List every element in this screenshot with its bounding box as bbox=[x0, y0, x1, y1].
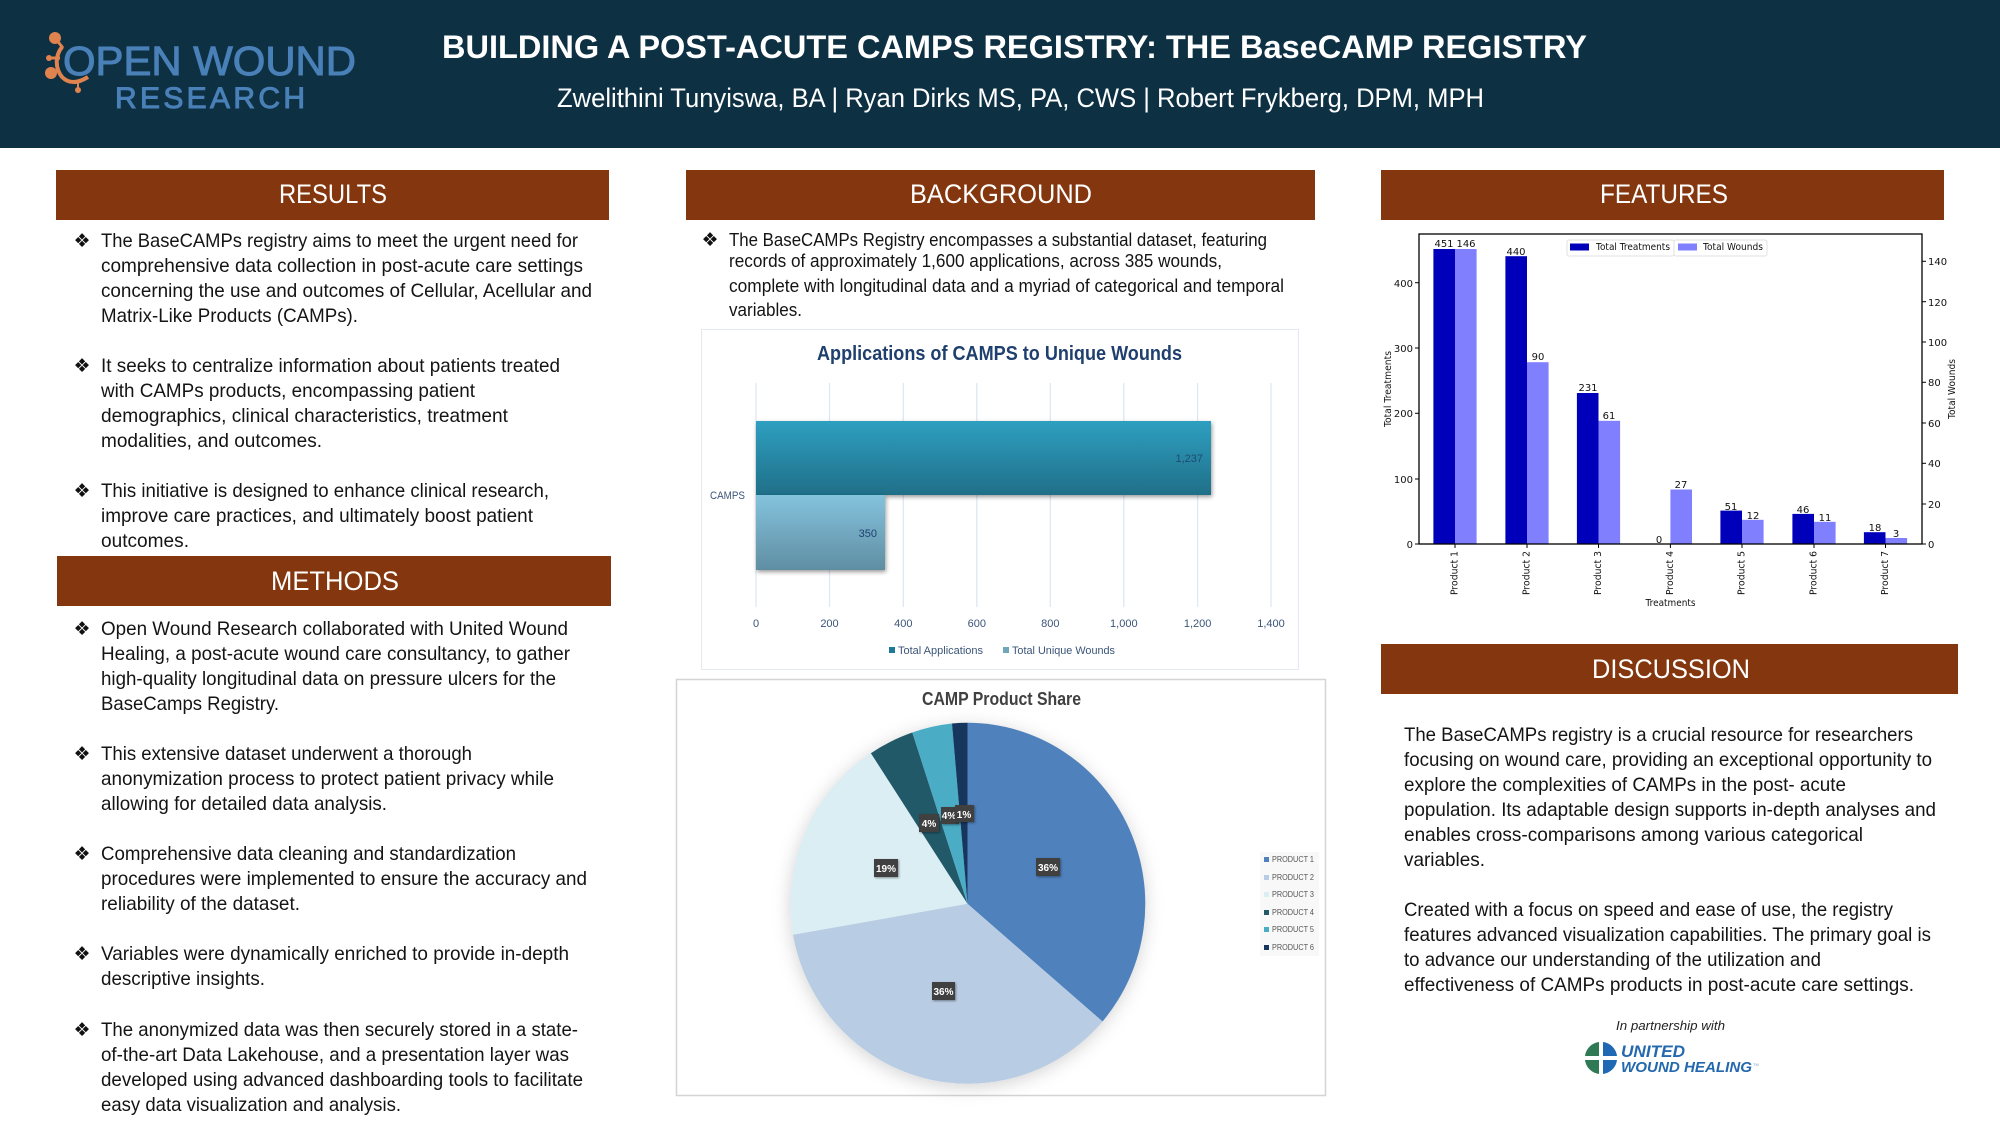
value labels: 27 bbox=[1675, 480, 1687, 491]
right axis labels: 80 bbox=[1928, 378, 1941, 389]
results bullet 1: concerning the use and outcomes of Cellular, Acellular and bbox=[101, 280, 592, 302]
background bullet: complete with longitudinal data and a myriad of categorical and temporal bbox=[729, 275, 1284, 296]
results bullet 1: comprehensive data collection in post-acute care settings bbox=[101, 255, 583, 277]
panel: methods bbox=[57, 556, 611, 1116]
value labels: 12 bbox=[1747, 511, 1759, 522]
pie chart title: CAMP Product Share bbox=[922, 689, 1081, 709]
value labels: 0 bbox=[1656, 535, 1662, 546]
value axis: 0 bbox=[753, 618, 759, 630]
data labels: 4% bbox=[942, 811, 956, 822]
logo: United Wound Healing bbox=[1585, 1042, 1759, 1076]
value labels: 451 bbox=[1434, 239, 1454, 250]
bar: total unique wounds: 350 bbox=[859, 528, 877, 540]
results bullet 2: demographics, clinical characteristics, treatment bbox=[101, 405, 509, 427]
discussion paragraph 2: features advanced visualization capabilities. The primary goal is bbox=[1404, 924, 1931, 946]
data labels: 1% bbox=[957, 810, 971, 821]
axes frame bbox=[1419, 234, 1922, 544]
data labels: 19% bbox=[876, 864, 896, 875]
right axis labels: 20 bbox=[1928, 500, 1941, 511]
left axis labels: 0 bbox=[1407, 540, 1413, 551]
discussion paragraph 2 bbox=[1404, 899, 1931, 996]
pie slices bbox=[790, 723, 1145, 1084]
value axis: 1,200 bbox=[1184, 618, 1211, 630]
background bullet bbox=[701, 229, 1284, 320]
axis titles bbox=[1383, 351, 1958, 609]
pie legend bbox=[1260, 852, 1319, 956]
results bullet 3 bbox=[73, 480, 549, 552]
value labels: 3 bbox=[1893, 529, 1899, 540]
product labels: Product 2 bbox=[1522, 551, 1532, 595]
value labels: 61 bbox=[1603, 411, 1615, 422]
chart legend: Total Applications bbox=[898, 645, 983, 657]
value axis: 600 bbox=[968, 618, 986, 630]
left axis labels: 300 bbox=[1394, 344, 1413, 355]
methods bullet 5 bbox=[73, 1019, 583, 1116]
product labels bbox=[1450, 551, 1891, 595]
bar chart: applications of CAMPS to unique wounds bbox=[702, 330, 1298, 670]
methods bullet 2: anonymization process to protect patient privacy while bbox=[101, 768, 554, 790]
background bullet: records of approximately 1,600 applications, across 385 wounds, bbox=[729, 250, 1222, 271]
data labels bbox=[874, 805, 1060, 1000]
pie legend: PRODUCT 5 bbox=[1272, 925, 1314, 934]
value labels: 46 bbox=[1797, 505, 1809, 516]
data labels: 36% bbox=[1038, 863, 1058, 874]
heading: background: BACKGROUND bbox=[910, 179, 1092, 209]
heading: methods bbox=[57, 556, 611, 606]
results bullet 1: ❖ bbox=[73, 230, 91, 252]
background bullet: ❖ bbox=[701, 229, 719, 251]
heading: results bbox=[56, 170, 609, 220]
product labels: Product 6 bbox=[1808, 551, 1820, 595]
logo: Open Wound Research bbox=[45, 32, 356, 115]
pie legend: PRODUCT 1 bbox=[1272, 855, 1314, 864]
panel: results bbox=[56, 170, 609, 552]
right axis labels: 0 bbox=[1928, 540, 1934, 551]
methods bullet 2: ❖ bbox=[73, 743, 91, 765]
methods bullet 5: The anonymized data was then securely stored in a state- bbox=[101, 1019, 578, 1041]
right axis labels: 120 bbox=[1928, 298, 1947, 309]
methods bullet 3: procedures were implemented to ensure the accuracy and bbox=[101, 868, 587, 890]
pie legend: PRODUCT 6 bbox=[1272, 943, 1314, 952]
bar: total unique wounds bbox=[756, 495, 885, 570]
left axis labels bbox=[1394, 279, 1413, 551]
value labels: 90 bbox=[1532, 352, 1544, 363]
methods bullet 3: reliability of the dataset. bbox=[101, 893, 300, 915]
chart legend bbox=[1567, 240, 1767, 256]
value axis: 1,400 bbox=[1257, 618, 1285, 630]
category label: CAMPS bbox=[710, 490, 745, 502]
background bullet: The BaseCAMPs Registry encompasses a substantial dataset, featuring bbox=[729, 229, 1267, 250]
discussion paragraph 1: explore the complexities of CAMPs in the post- acute bbox=[1404, 774, 1846, 796]
discussion paragraph 2: to advance our understanding of the utilization and bbox=[1404, 949, 1821, 971]
data labels: 36% bbox=[933, 987, 954, 998]
treatment bars bbox=[1433, 249, 1886, 544]
methods bullet 1: BaseCamps Registry. bbox=[101, 693, 279, 715]
background bullet: variables. bbox=[729, 299, 802, 320]
heading: discussion: DISCUSSION bbox=[1592, 654, 1750, 684]
axis titles: Treatments bbox=[1645, 598, 1696, 609]
left axis labels: 100 bbox=[1394, 475, 1413, 486]
wound bars bbox=[1455, 249, 1907, 544]
value labels: 146 bbox=[1456, 239, 1476, 250]
results bullet 2: ❖ bbox=[73, 355, 91, 377]
pie chart: CAMP product share bbox=[676, 680, 1326, 1096]
value labels: 440 bbox=[1506, 247, 1526, 258]
chart legend: Total Wounds bbox=[1702, 242, 1763, 253]
discussion paragraph 2: effectiveness of CAMPs products in post-acute care settings. bbox=[1404, 974, 1914, 996]
value labels: 51 bbox=[1725, 502, 1737, 513]
methods bullet 4 bbox=[73, 943, 569, 990]
results bullet 1: Matrix-Like Products (CAMPs). bbox=[101, 305, 358, 327]
results bullet 2 bbox=[73, 355, 560, 452]
panel: features bbox=[1381, 170, 1958, 609]
pie legend: PRODUCT 2 bbox=[1272, 873, 1314, 882]
results bullet 2: modalities, and outcomes. bbox=[101, 430, 322, 452]
results bullet 3: This initiative is designed to enhance clinical research, bbox=[101, 480, 549, 502]
value labels: 18 bbox=[1869, 523, 1881, 534]
methods bullet 3 bbox=[73, 843, 587, 915]
value labels: 11 bbox=[1819, 513, 1831, 524]
title: BUILDING A POST-ACUTE CAMPS REGISTRY: THE BaseCAMP REGISTRY bbox=[442, 29, 1587, 65]
value axis: 1,000 bbox=[1110, 618, 1138, 630]
discussion paragraph 2: Created with a focus on speed and ease of use, the registry bbox=[1404, 899, 1893, 921]
results bullet 1 bbox=[73, 230, 592, 327]
heading: results: RESULTS bbox=[279, 179, 387, 209]
methods bullet 5: developed using advanced dashboarding tools to facilitate bbox=[101, 1069, 583, 1091]
methods bullet 4: Variables were dynamically enriched to provide in-depth bbox=[101, 943, 569, 965]
value axis: 400 bbox=[894, 618, 912, 630]
discussion paragraph 1: population. Its adaptable design supports in-depth analyses and bbox=[1404, 799, 1936, 821]
left axis labels: 200 bbox=[1394, 409, 1413, 420]
bar: total applications: 1,237 bbox=[1175, 453, 1203, 465]
product labels: Product 1 bbox=[1450, 551, 1460, 595]
methods bullet 5: of-the-art Data Lakehouse, and a presentation layer was bbox=[101, 1044, 569, 1066]
discussion paragraph 1: enables cross-comparisons among various categorical bbox=[1404, 824, 1863, 846]
logo: United Wound Healing: UNITED bbox=[1621, 1043, 1685, 1061]
value axis: 200 bbox=[820, 618, 839, 630]
chart title: Applications of CAMPS to Unique Wounds bbox=[817, 343, 1182, 365]
discussion paragraph 1: variables. bbox=[1404, 849, 1485, 871]
results bullet 3: ❖ bbox=[73, 480, 91, 502]
heading: features: FEATURES bbox=[1600, 179, 1728, 209]
data labels: 4% bbox=[922, 819, 936, 830]
right axis labels: 140 bbox=[1928, 257, 1947, 268]
heading: background bbox=[686, 170, 1315, 220]
pie legend: PRODUCT 3 bbox=[1272, 890, 1314, 899]
value axis: 800 bbox=[1041, 618, 1059, 630]
right axis labels: 100 bbox=[1928, 338, 1947, 349]
methods bullet 5: easy data visualization and analysis. bbox=[101, 1094, 401, 1116]
chart legend: Total Unique Wounds bbox=[1012, 645, 1115, 657]
panel: discussion bbox=[1381, 644, 1958, 1076]
logo: Open Wound Research: OPEN WOUND bbox=[63, 38, 356, 84]
right axis labels: 60 bbox=[1928, 419, 1941, 430]
value axis bbox=[753, 618, 1285, 630]
results bullet 2: It seeks to centralize information about patients treated bbox=[101, 355, 560, 377]
panel: background bbox=[676, 170, 1326, 1096]
logo: Open Wound Research: RESEARCH bbox=[115, 82, 305, 115]
results bullet 3: outcomes. bbox=[101, 530, 189, 552]
methods bullet 4: descriptive insights. bbox=[101, 968, 265, 990]
results bullet 2: with CAMPs products, encompassing patient bbox=[100, 380, 476, 402]
methods bullet 1: Open Wound Research collaborated with United Wound bbox=[101, 618, 568, 640]
methods bullet 3: ❖ bbox=[73, 843, 91, 865]
discussion paragraph 1 bbox=[1404, 724, 1936, 871]
logo: United Wound Healing: TM bbox=[1753, 1062, 1759, 1067]
results bullet 1: The BaseCAMPs registry aims to meet the urgent need for bbox=[101, 230, 578, 252]
product labels: Product 4 bbox=[1665, 551, 1676, 595]
methods bullet 1 bbox=[73, 618, 570, 715]
discussion paragraph 1: The BaseCAMPs registry is a crucial resource for researchers bbox=[1404, 724, 1913, 746]
chart legend bbox=[889, 645, 1115, 657]
results bullet 3: improve care practices, and ultimately boost patient bbox=[101, 505, 534, 527]
methods bullet 3: Comprehensive data cleaning and standardization bbox=[101, 843, 516, 865]
heading: discussion bbox=[1381, 644, 1958, 694]
heading: features bbox=[1381, 170, 1944, 220]
discussion paragraph 1: focusing on wound care, providing an exceptional opportunity to bbox=[1404, 749, 1932, 771]
bar: total applications bbox=[756, 421, 1211, 495]
product labels: Product 7 bbox=[1880, 551, 1891, 595]
product labels: Product 5 bbox=[1736, 551, 1748, 595]
methods bullet 2 bbox=[73, 743, 554, 815]
pie legend: PRODUCT 4 bbox=[1272, 908, 1314, 917]
value labels bbox=[1434, 239, 1899, 546]
chart legend: Total Treatments bbox=[1595, 242, 1670, 253]
methods bullet 2: allowing for detailed data analysis. bbox=[101, 793, 387, 815]
product labels: Product 3 bbox=[1593, 551, 1604, 595]
value labels: 231 bbox=[1578, 383, 1598, 394]
page header bbox=[0, 0, 2000, 148]
axis titles: Total Treatments bbox=[1383, 351, 1394, 428]
left axis labels: 400 bbox=[1394, 279, 1413, 290]
grouped bar chart: treatments and wounds by product bbox=[1383, 234, 1958, 609]
right axis labels: 40 bbox=[1928, 459, 1941, 470]
authors: Zwelithini Tunyiswa, BA | Ryan Dirks MS, PA, CWS | Robert Frykberg, DPM, MPH bbox=[557, 83, 1484, 113]
methods bullet 1: Healing, a post-acute wound care consultancy, to gather bbox=[101, 643, 570, 665]
methods bullet 5: ❖ bbox=[73, 1019, 91, 1041]
methods bullet 1: high-quality longitudinal data on pressure ulcers for the bbox=[101, 668, 556, 690]
methods bullet 1: ❖ bbox=[73, 618, 91, 640]
methods bullet 4: ❖ bbox=[73, 943, 91, 965]
logo: United Wound Healing: WOUND HEALING bbox=[1621, 1060, 1752, 1076]
right axis labels bbox=[1928, 257, 1947, 551]
methods bullet 2: This extensive dataset underwent a thorough bbox=[101, 743, 472, 765]
axis titles: Total Wounds bbox=[1947, 359, 1958, 420]
heading: methods: METHODS bbox=[271, 566, 399, 596]
partner credit: In partnership with bbox=[1616, 1018, 1725, 1033]
